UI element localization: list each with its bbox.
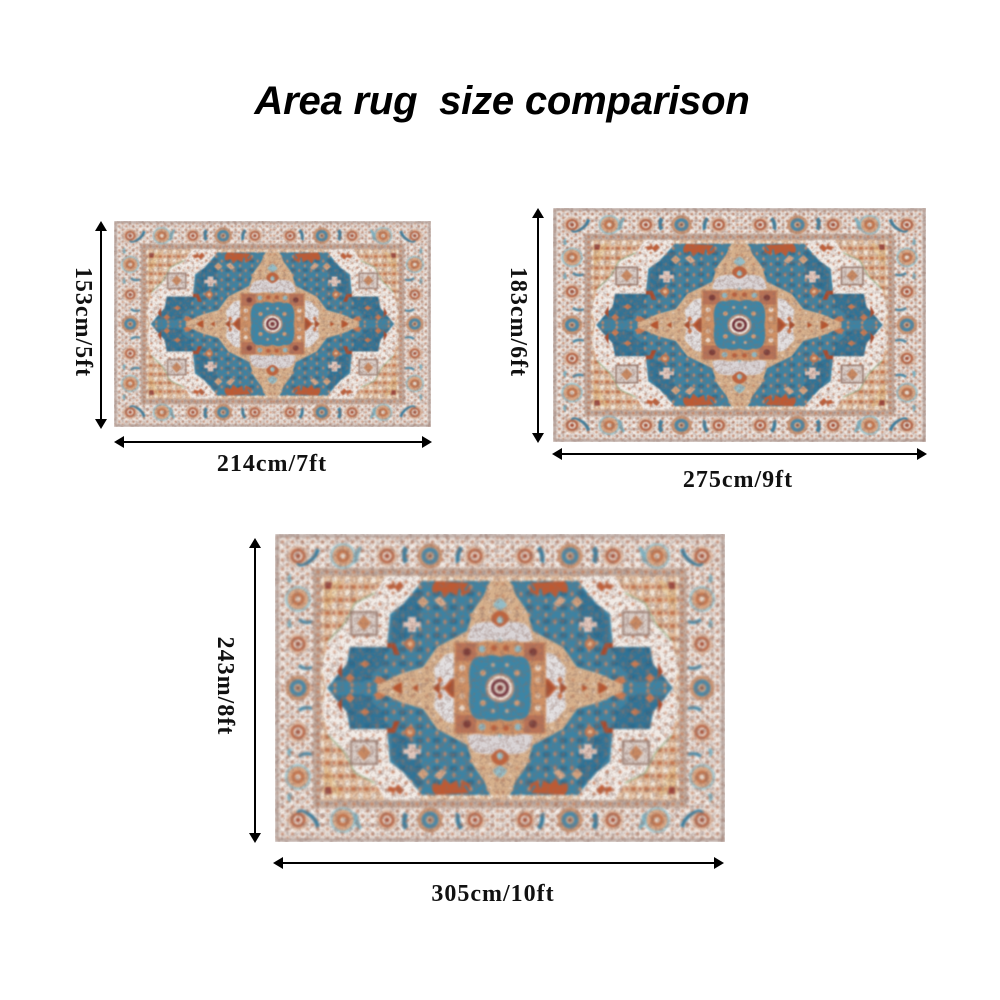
width arrow [552, 448, 927, 460]
width arrow [273, 857, 724, 869]
width label: 305cm/10ft [431, 881, 555, 907]
panel: small rug 214cm by 153cm [70, 221, 432, 477]
width label: 275cm/9ft [683, 467, 793, 493]
height arrow [95, 221, 107, 429]
height arrow [532, 208, 544, 443]
medium rug image [553, 208, 926, 442]
width arrow [114, 436, 432, 448]
panel: large rug 305cm by 243cm [212, 534, 725, 907]
title: Area rug size comparison [254, 79, 750, 123]
width label: 214cm/7ft [217, 451, 327, 477]
height label: 243m/8ft [212, 637, 238, 735]
panel: medium rug 275cm by 183cm [505, 208, 927, 493]
small rug image [114, 221, 431, 427]
height label: 153cm/5ft [70, 267, 96, 377]
height arrow [249, 538, 261, 843]
large rug image [275, 534, 725, 842]
height label: 183cm/6ft [505, 267, 531, 377]
